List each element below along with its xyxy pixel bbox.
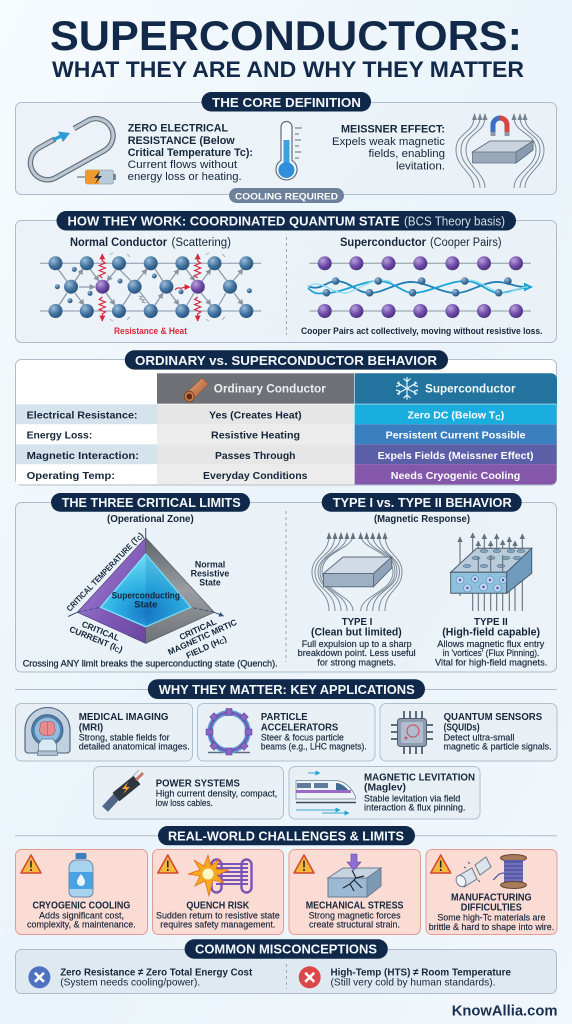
heading: superconductor: Superconductor [340,237,427,249]
heading: type i vs type ii: TYPE I vs. TYPE II BEHAVIOR [333,495,512,510]
heading: how they work: (BCS Theory basis) [404,215,505,229]
table row: magnetic interaction: Passes Through [215,450,296,462]
table row: electrical resistance: Zero DC (Below T [408,409,495,421]
text: mechanical stress: create structural strain. [309,920,400,930]
heading: common misconceptions [185,939,388,959]
text: magnetic levitation [364,772,475,812]
text: particle accelerators: ACCELERATORS [261,723,339,734]
label: superconducting state: State [134,600,157,611]
caption: cooper pairs: Cooper Pairs act collectively, moving without resistive loss. [301,326,542,337]
card: cryogenic cooling [16,850,148,934]
table row: magnetic interaction [16,444,557,464]
table row: operating temp: Needs Cryogenic Cooling [391,470,520,482]
text: type i: TYPE I [342,616,372,628]
icon: dewar bottle [69,853,93,897]
label: critical current: CRITICAL [80,619,121,643]
table header: superconductor [355,373,557,404]
text: type i: (Clean but limited) [311,626,402,638]
text: zero resistance misconception: (System needs cooling/power). [60,977,200,989]
label: cooling required: COOLING REQUIRED [235,192,338,202]
icon: warning triangle [21,855,41,873]
icon: maglev train [296,773,356,813]
label: normal resistive state [191,560,229,588]
icon: copper pipe [184,378,208,402]
card: magnetic levitation [289,766,480,819]
label: critical current [68,619,124,655]
text: mechanical stress: Strong magnetic forces [309,910,401,920]
icon: cracked block [328,854,381,897]
atoms: blue lattice [48,256,253,318]
table row: energy loss: Persistent Current Possible [386,430,526,442]
heading: the core definition [202,92,371,112]
text: high-temp misconception: High-Temp (HTS) ≠ Room Temperature [330,966,511,978]
icon: snowflake [396,377,418,400]
title: WHAT THEY ARE AND WHY THEY MATTER [52,57,524,82]
table row: electrical resistance [16,404,557,424]
text: type i: breakdown point. Less useful [298,648,416,658]
text: medical imaging: (MRI) [79,723,103,734]
waves: paired electron flow [308,280,532,294]
atoms: purple lattice [318,256,523,318]
table row: magnetic interaction: Magnetic Interaction: [27,450,139,462]
text: power systems: low loss cables. [156,798,213,808]
heading: how they work [56,211,516,230]
heading: superconductor: (Cooper Pairs) [430,237,502,249]
label: critical magnetic field: ) [221,633,228,644]
text: type ii: (High-field capable) [442,626,540,638]
table row: electrical resistance: Electrical Resistance: [27,409,138,421]
text: mechanical stress: MECHANICAL STRESS [306,901,404,912]
text: high-temp misconception [330,966,511,989]
text: particle accelerators [261,712,367,752]
table row: operating temp [16,464,556,484]
text: magnetic levitation: Stable levitation via field [364,793,460,803]
text: quantum sensors: QUANTUM SENSORS [444,712,542,723]
brand: knowallia: KnowAllia.com [452,1002,558,1019]
text: meissner effect [332,123,446,172]
heading: ordinary vs superconductor: ORDINARY vs. SUPERCONDUCTOR BEHAVIOR [135,353,438,368]
heading: real-world challenges: REAL-WORLD CHALLENGES & LIMITS [168,829,404,844]
text: meissner effect: levitation. [396,160,445,172]
text: medical imaging: MEDICAL IMAGING [79,712,169,723]
label: critical temperature: CRITICAL TEMPERATURE (T [64,525,150,613]
icon: superconducting loop with battery [30,119,116,184]
heading: three critical limits: THE THREE CRITICAL LIMITS [62,495,241,510]
card: manufacturing difficulties [426,850,557,934]
text: meissner effect: fields, enabling [368,148,445,160]
label: critical magnetic field: C [219,638,226,647]
icon: accelerator ring [206,708,252,755]
text: quantum sensors [444,712,552,752]
text: type ii: TYPE II [474,616,508,628]
text: particle accelerators: beams (e.g., LHC magnets). [261,742,367,752]
label: critical current: CURRENT (I [68,624,117,652]
table row: energy loss: Resistive Heating [211,430,300,442]
subheading: magnetic response: (Magnetic Response) [374,513,470,525]
card: particle accelerators [198,704,375,761]
panel: core definition [16,92,556,194]
text: medical imaging [79,712,190,752]
arrows: lattice bonds [71,269,243,305]
heading: common misconceptions: COMMON MISCONCEPTIONS [195,941,377,956]
text: manufacturing difficulties: DIFFICULTIES [461,903,522,914]
text: quench risk: QUENCH RISK [186,901,250,912]
label: normal resistive state: State [199,578,221,588]
diagram: superconductor cooper pairs [301,237,542,337]
text: type i: Full expulsion up to a sharp [302,639,412,649]
text: cryogenic cooling [27,901,136,930]
icon: squid chip [391,711,433,754]
text: particle accelerators: PARTICLE [261,712,308,723]
icon: warning triangle [294,855,314,873]
label: superconducting state [112,590,180,611]
text: power systems [156,779,277,808]
caption: quench: Crossing ANY limit breaks the superconducting state (Quench). [23,658,278,669]
card: medical imaging [16,704,192,761]
text: type i: for strong magnets. [317,657,396,667]
panel: how they work [16,211,556,342]
text: magnetic levitation: MAGNETIC LEVITATION [364,772,475,783]
text: cryogenic cooling: CRYOGENIC COOLING [32,901,130,912]
subheading: operational zone: (Operational Zone) [107,513,194,525]
text: manufacturing difficulties: MANUFACTURING [451,893,532,904]
text: manufacturing difficulties: brittle & hard to shape into wire. [429,922,554,932]
text: quantum sensors: Detect ultra-small [444,733,514,743]
atoms: scattering purple [96,280,205,294]
label: critical current: ) [118,644,124,655]
text: zero electrical resistance: ZERO ELECTRICAL [128,123,228,135]
text: magnetic levitation: interaction & flux pinning. [364,802,465,812]
icon: type ii vortices [451,533,532,611]
table header: ordinary conductor [157,373,354,404]
label: critical current: C [113,646,120,654]
icon: quench coil with spark [188,855,252,896]
text: zero electrical resistance: RESISTANCE (Below [128,135,235,147]
text: quench risk: Sudden return to resistive state [156,910,280,920]
table row: energy loss: Energy Loss: [27,430,92,442]
section: real-world challenges [15,826,557,934]
table row: operating temp: Everyday Conditions [203,470,308,482]
label: critical temperature: ) [136,530,145,539]
text: mechanical stress [306,901,404,930]
text: meissner effect: MEISSNER EFFECT: [341,123,445,135]
card: quantum sensors [380,704,557,761]
text: manufacturing difficulties: Some high-Tc materials are [437,913,545,923]
text: manufacturing difficulties [429,893,554,932]
panel: common misconceptions [16,939,556,994]
icon: mri scanner [25,708,70,756]
table row: operating temp: Operating Temp: [27,470,115,482]
text: power systems: High current density, compact, [156,789,277,799]
text: zero electrical resistance [128,123,253,183]
text: quantum sensors: (SQUIDs) [444,723,480,734]
icon: meissner field lines, magnet and block [456,113,544,188]
card: quench risk [152,850,284,934]
table row: electrical resistance: C [495,413,501,422]
text: meissner effect: Expels weak magnetic [332,136,446,148]
icon: power cable [105,770,143,809]
text: type i [298,616,416,667]
label: critical magnetic field: FIELD (H [184,637,221,661]
text: quench risk: requires safety management. [160,920,275,930]
icon: type i field expulsion [312,532,402,611]
text: magnetic levitation: (Maglev) [364,783,406,794]
diagram: normal conductor scattering lattice [40,237,261,337]
heading: the core definition: THE CORE DEFINITION [212,95,361,110]
heading: superconductor [340,237,502,249]
caption: resistance and heat: Resistance & Heat [114,326,188,337]
label: superconducting state: Superconducting [112,590,180,601]
table row: electrical resistance: ) [501,409,504,421]
heading: normal conductor: Normal Conductor [70,237,167,249]
panel: comparison table [16,350,557,485]
icon: thermometer [276,122,302,180]
chart: critical limits diamond [64,528,238,661]
table header: ordinary conductor: Ordinary Conductor [214,383,326,395]
heading: normal conductor [70,237,231,249]
text: high-temp misconception: (Still very cold by human standards). [330,977,496,989]
icon: warning triangle [158,855,178,873]
text: type ii: Allows magnetic flux entry [437,639,545,649]
table row: electrical resistance: Yes (Creates Heat) [209,409,302,421]
heading: how they work: HOW THEY WORK: COORDINATED QUANTUM STATE [68,214,400,229]
section: key applications [15,679,557,819]
text: type ii: in 'vortices' (Flux Pinning). [443,648,539,658]
panel: limits and type behaviour [16,493,556,672]
table row: magnetic interaction: Expels Fields (Meissner Effect) [378,450,534,462]
card: mechanical stress [289,850,420,934]
title: SUPERCONDUCTORS: [50,12,522,59]
heading: why they matter: WHY THEY MATTER: KEY APPLICATIONS [159,682,415,697]
icon: broken tube and wire spool [454,854,526,888]
text: particle accelerators: Steer & focus particle [261,733,344,743]
heading: normal conductor: (Scattering) [172,237,231,249]
label: cooling required [229,188,344,203]
text: zero resistance misconception: Zero Resistance ≠ Zero Total Energy Cost [60,966,253,978]
icon: warning triangle [431,855,451,873]
label: critical temperature: C [136,535,144,543]
text: zero electrical resistance: Critical Temperature Tc): [128,147,253,159]
icon: blue cross [28,966,50,988]
text: quench risk [156,901,280,930]
label: normal resistive state: Resistive [191,569,229,579]
text: medical imaging: detailed anatomical images. [79,742,190,752]
label: normal resistive state: Normal [195,560,225,570]
text: zero electrical resistance: Current flows without [128,159,237,171]
table row: energy loss [16,424,557,444]
arrows: red heat squiggles [99,254,201,321]
icon: red cross [299,966,321,988]
text: power systems: POWER SYSTEMS [156,779,240,790]
table header: superconductor: Superconductor [425,383,516,395]
text: quantum sensors: magnetic & particle signals. [444,742,552,752]
atoms: cooper pair electrons [323,277,512,297]
text: type ii [435,616,547,667]
text: medical imaging: Strong, stable fields for [79,733,170,743]
text: type ii: Vital for high-field magnets. [435,657,547,667]
card: power systems [94,766,284,819]
title [50,12,524,82]
label: critical magnetic field: CRITICAL [178,616,218,642]
text: cryogenic cooling: complexity, & maintenance. [27,920,136,930]
text: zero electrical resistance: energy loss or heating. [128,171,242,183]
text: cryogenic cooling: Adds significant cost, [39,910,124,920]
label: critical magnetic field: MAGNETIC MRTIC [166,617,238,657]
text: zero resistance misconception [60,966,253,989]
